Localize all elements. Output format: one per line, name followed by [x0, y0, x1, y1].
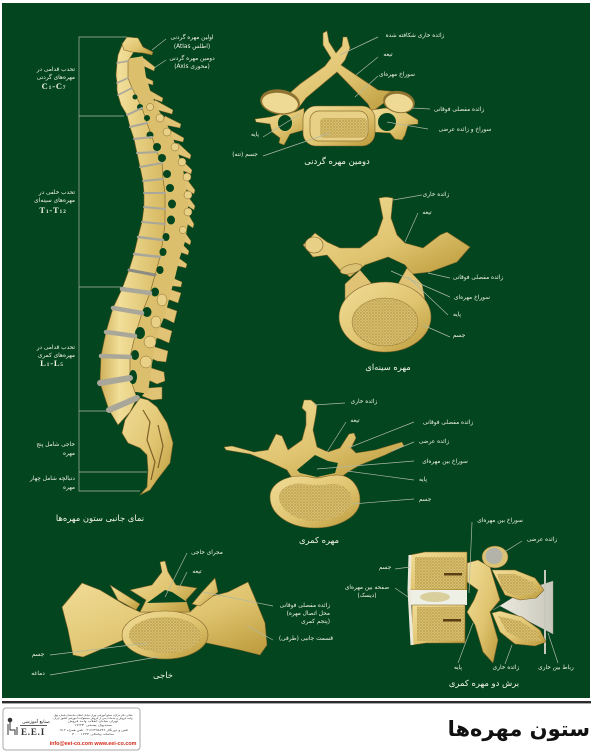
upper spongy	[497, 574, 538, 595]
label: first cervical vertebra: (اطلس Atlas)	[174, 44, 210, 50]
sacral canal	[147, 590, 187, 603]
labels: جسم	[379, 565, 392, 571]
labels: سوراخ بین مهره‌ای	[422, 459, 468, 465]
intervertebral disc	[409, 590, 467, 605]
sacral body	[122, 611, 208, 659]
logo text: E.E.I	[21, 727, 45, 737]
label: cervical curvature: تحدب قدامی در	[36, 67, 75, 73]
labels: سوراخ و زائده عرضی	[439, 127, 492, 133]
anterior ligament	[409, 555, 412, 645]
spinous processes	[136, 56, 195, 400]
transverse end left	[305, 237, 323, 253]
labels	[31, 550, 333, 677]
label: thoracic curvature: تحدب خلفی در	[38, 190, 75, 196]
label: coccyx vertebrae	[29, 476, 75, 491]
labels: زائده عرضی	[527, 537, 557, 543]
labels: تیغه	[192, 569, 202, 575]
supraspinous band	[544, 570, 546, 654]
spongy bone	[129, 617, 201, 653]
label: lumbar curvature	[36, 345, 75, 368]
spinous arch	[130, 561, 197, 612]
label: cervical curvature: مهره‌های گردنی	[37, 73, 75, 81]
footer contact card	[3, 708, 140, 750]
label: lumbar curvature: L1-L5	[40, 358, 64, 368]
upper spinous section	[492, 570, 544, 600]
intervertebral foramina	[129, 94, 176, 384]
labels: زائده خاری	[493, 665, 520, 671]
labels: دماغه	[31, 671, 45, 677]
lamina bone	[467, 560, 500, 663]
label: thoracic curvature: مهره‌های سینه‌ای	[34, 198, 75, 204]
heading: دومین مهره گردنی	[304, 156, 370, 166]
labels: پایه	[251, 132, 259, 138]
arch and transverse processes	[224, 400, 404, 478]
panel: sacrum	[31, 550, 333, 680]
card outline	[3, 708, 140, 750]
superior articular facet	[339, 262, 363, 276]
transverse process right	[372, 108, 418, 140]
panel: section of two lumbar vertebrae	[345, 518, 574, 688]
articular facets	[140, 104, 192, 368]
label: sacrum vertebrae: مهره	[63, 451, 75, 457]
label: lumbar curvature: مهره‌های کمری	[38, 352, 75, 359]
vertebral foramen	[367, 257, 405, 283]
vertebral body	[270, 475, 360, 528]
superior articular facet right	[381, 88, 417, 116]
leader lines	[314, 403, 414, 504]
upper basivertebral canal	[444, 573, 462, 576]
labels: زائده خاری	[351, 399, 378, 405]
labels: (محل اتصال مهره	[287, 611, 330, 617]
transverse process cut	[486, 548, 502, 564]
spongy bone	[320, 118, 367, 138]
superior articular right	[192, 578, 218, 606]
labels: تیغه	[422, 210, 432, 216]
labels: رباط بین خاری	[538, 665, 574, 671]
facet left surface	[261, 91, 299, 115]
vertebral foramen	[297, 455, 338, 477]
lower vertebral body	[412, 605, 465, 645]
address text: واحد فروش و خدمات پس از فروش محصولات آموزشی کشور ایران	[54, 716, 133, 720]
labels: زائده عرضی	[419, 439, 449, 445]
facet right surface	[384, 92, 414, 114]
labels: سوراخ مهره‌ای	[379, 72, 415, 78]
heading: مهره سینه‌ای	[365, 362, 411, 372]
labels	[232, 32, 492, 158]
labels: زائده مفصلی فوقانی	[453, 275, 503, 281]
bottom rule	[2, 701, 591, 703]
labels: پایه	[419, 477, 427, 483]
transverse foramen right	[378, 113, 396, 131]
upper body spongy	[415, 557, 465, 589]
labels	[350, 399, 473, 503]
icon: seated figure logo	[8, 718, 17, 735]
sacral wings	[62, 582, 267, 657]
lower body spongy	[417, 607, 464, 641]
label: thoracic curvature: T1-T12	[39, 205, 67, 215]
vertebral body	[339, 282, 431, 352]
labels: جسم	[419, 497, 432, 503]
panel: thoracic vertebra	[303, 192, 503, 372]
lower spinous section	[492, 611, 546, 646]
labels: مجرای خاجی	[191, 550, 223, 556]
labels: پایه	[453, 312, 461, 318]
pedicles	[345, 268, 425, 300]
label: lumbar curvature: تحدب قدامی در	[36, 345, 75, 351]
labels: تیغه	[350, 418, 360, 424]
labels: زائده مفصلی فوقانی	[434, 107, 484, 113]
panel: lateral spine view	[29, 33, 215, 523]
heading: مهره کمری	[299, 535, 339, 545]
labels	[345, 518, 574, 671]
spongy bone	[352, 298, 418, 346]
address text: سامانه پیامکی ۳۰۰۰۱۲۳۴	[72, 732, 115, 736]
label: thoracic curvature	[34, 190, 75, 215]
transverse foramen left	[278, 115, 292, 131]
address text	[53, 713, 133, 736]
region bracket lines	[79, 37, 147, 491]
labels: جسم	[453, 333, 466, 339]
labels: جسم (تنه)	[232, 152, 258, 158]
label: sacrum vertebrae: خاجی شامل پنج	[36, 442, 75, 448]
labels	[422, 192, 503, 339]
heading: خاجی	[153, 670, 173, 680]
labels: زائده مفصلی فوقانی	[280, 603, 330, 609]
label: cervical curvature: C1-C7	[42, 81, 66, 91]
superior articular left	[110, 585, 140, 610]
label: cervical curvature	[36, 67, 75, 91]
lower spongy	[498, 616, 541, 641]
labels: زائده خاری	[423, 192, 450, 198]
articular pillar	[131, 58, 176, 392]
labels: پنجم کمری)	[301, 618, 330, 625]
labels: (دیسک)	[357, 592, 377, 599]
intervertebral discs	[100, 61, 165, 410]
label: sacrum vertebrae	[36, 442, 75, 457]
vertebral body	[303, 106, 375, 146]
labels: سوراخ بین مهره‌ای	[477, 518, 523, 524]
labels: قسمت جانبی (طرفی)	[279, 636, 333, 642]
label: coccyx vertebrae: مهره	[63, 485, 75, 491]
transverse process left	[255, 108, 304, 145]
vertebral body rim	[310, 111, 368, 141]
vertebral arch	[303, 197, 470, 277]
transverse process	[482, 546, 508, 568]
neural arch and bifid spine	[284, 31, 398, 112]
spongy bone	[279, 484, 352, 521]
address text: نشانی دفتر مرکزی صنایع آموزشی تهران خیابان انقلاب ساختمان شماره چهار	[53, 713, 133, 717]
nucleus of disc	[420, 592, 450, 602]
logo text	[20, 719, 50, 737]
labels: پایه	[454, 665, 462, 671]
heading: lateral view: نمای جانبی ستون مهره‌ها	[56, 513, 144, 523]
labels: جسم	[32, 652, 45, 658]
label: first cervical vertebra: اولین مهره گردنی	[170, 33, 214, 41]
panel: lumbar vertebra	[224, 399, 473, 545]
labels: زائده مفصلی فوقانی	[423, 420, 473, 426]
sacrum and coccyx lateral	[122, 398, 173, 495]
label: first cervical vertebra: (محوری Axis)	[174, 64, 210, 70]
leader lines	[263, 37, 430, 156]
leader lines	[395, 522, 558, 664]
labels: تیغه	[383, 52, 393, 58]
superior articular facet left	[258, 87, 302, 117]
heading: برش دو مهره کمری	[449, 678, 519, 688]
vertebral bodies column	[100, 45, 165, 425]
logo text: صنایع آموزشی	[22, 719, 50, 725]
address text: صندوق پستی ۱۲۳۴	[74, 723, 113, 727]
address text: تهران خیابان انقلاب واحد فروش	[68, 719, 118, 723]
sacrum shading	[143, 410, 163, 480]
panel: second cervical vertebra	[232, 31, 492, 166]
leader lines	[50, 553, 273, 675]
address text: تلفن و دورنگار ۰۲۱۶۶۴۹۸۷۴۶ تلفن همراه ۰۹۱۲	[58, 728, 128, 732]
labels: صفحه بین مهره‌ای	[345, 585, 389, 591]
interspinous ligament	[493, 581, 553, 634]
contact line: info@eei-co.com www.eei-co.com	[50, 741, 137, 747]
labels: زائده خاری شکافته شده	[386, 32, 445, 39]
atlas vertebra	[122, 37, 153, 55]
main title: ستون مهره‌ها	[448, 717, 590, 741]
upper vertebral body	[410, 552, 467, 590]
label: first cervical vertebra	[152, 33, 215, 70]
leader lines	[391, 195, 450, 337]
label: coccyx vertebrae: دنبالچه شامل چهار	[29, 476, 75, 482]
labels: سوراخ مهره‌ای	[454, 295, 490, 301]
lower basivertebral canal	[443, 619, 461, 622]
label: first cervical vertebra: دومین مهره گردنی	[169, 54, 215, 62]
